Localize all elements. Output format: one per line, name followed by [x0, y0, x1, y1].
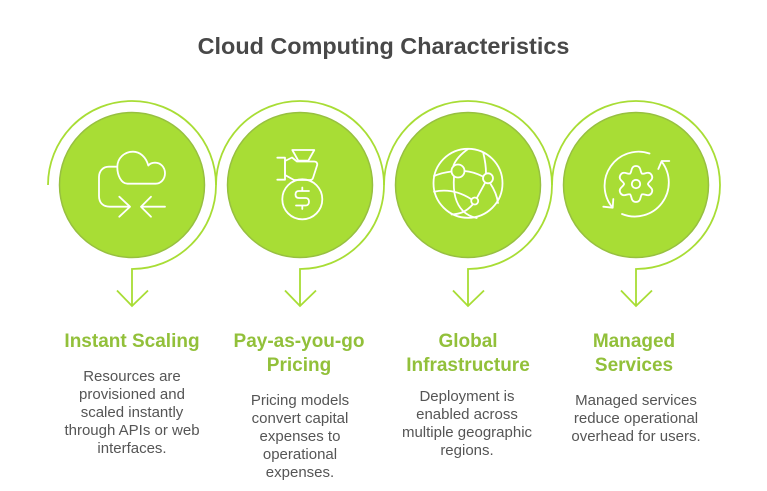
description 1: through APIs or web [64, 422, 200, 439]
description 2: operational [263, 446, 337, 463]
outer arc arrow 1 [48, 101, 216, 306]
description 3: Deployment is [419, 388, 515, 405]
panel: instant scaling [48, 101, 216, 457]
outer arc arrow 3 [384, 101, 552, 306]
icon: cloud with arrows [99, 152, 165, 217]
description 2: convert capital [252, 410, 348, 427]
description 4: overhead for users. [571, 428, 701, 445]
description 1: Resources are [83, 368, 181, 385]
description 3: regions. [440, 442, 494, 459]
panel: managed services [552, 101, 720, 445]
outer arc arrow 4 [552, 101, 720, 306]
outer arc arrow 2 [216, 101, 384, 306]
heading 3: Global [438, 331, 498, 352]
panel: pay-as-you-go pricing [216, 101, 384, 481]
description 2: expenses. [266, 464, 334, 481]
description 1: interfaces. [97, 440, 167, 457]
description 4: Managed services [575, 392, 697, 409]
description 1: provisioned and [79, 386, 185, 403]
heading 2: Pay-as-you-go [234, 331, 364, 352]
description 2: Pricing models [251, 392, 349, 409]
panel: global infrastructure [384, 101, 552, 459]
heading 1: Instant Scaling [64, 331, 200, 352]
circle 2 [228, 112, 372, 258]
circle 1 [60, 112, 204, 258]
icon: money bag [277, 150, 322, 219]
heading 2: Pricing [267, 355, 331, 376]
circle 4 [564, 112, 708, 258]
heading 4: Services [595, 355, 673, 376]
title: Cloud Computing Characteristics [198, 33, 569, 59]
description 4: reduce operational [574, 410, 698, 427]
description 1: scaled instantly [81, 404, 184, 421]
heading 3: Infrastructure [406, 355, 530, 376]
icon: network globe [434, 149, 502, 218]
description 3: multiple geographic [402, 424, 533, 441]
description 3: enabled across [416, 406, 518, 423]
heading 4: Managed [593, 331, 675, 352]
circle 3 [396, 112, 540, 258]
description 2: expenses to [260, 428, 340, 445]
icon: gear with rotating arrows [603, 152, 669, 217]
